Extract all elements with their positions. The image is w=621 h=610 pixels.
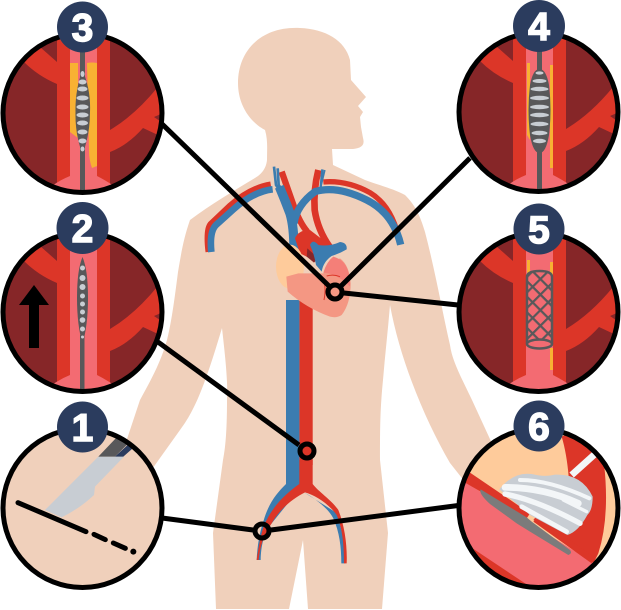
aorta	[299, 300, 313, 465]
connector lines	[158, 122, 470, 530]
panel: step 4 balloon inflated	[456, 0, 621, 199]
badge 2: 2	[72, 208, 93, 251]
badge 6: 6	[528, 406, 550, 449]
red tissue	[533, 430, 606, 563]
human body silhouette	[125, 28, 495, 609]
badge 5	[514, 204, 564, 254]
arrow: upward	[19, 285, 49, 348]
panel: step 2 catheter insertion	[0, 202, 170, 399]
heart	[276, 230, 351, 317]
badge 4	[513, 0, 565, 52]
circulatory system	[207, 167, 401, 563]
badge 6	[514, 400, 564, 452]
catheter and balloon	[528, 50, 550, 195]
pink vessel	[462, 483, 593, 585]
thin plaque	[527, 63, 553, 168]
badge 5: 5	[528, 209, 550, 252]
plaque	[70, 62, 97, 168]
catheter and balloon	[77, 257, 88, 390]
vena cava	[286, 300, 299, 465]
iliac vessels	[257, 460, 347, 563]
panel: step 5 stent placed	[456, 204, 621, 399]
applicator stick	[572, 454, 595, 475]
badge 1	[57, 402, 108, 452]
badge 3	[57, 2, 108, 52]
thin plaque	[527, 260, 553, 370]
badge 3: 3	[72, 7, 93, 50]
stent	[527, 271, 552, 348]
neck and arm arteries	[207, 167, 401, 252]
scalpel	[18, 437, 136, 555]
badge 1: 1	[72, 407, 93, 450]
gauze	[499, 474, 593, 535]
panel: step 3 balloon in plaque	[0, 2, 170, 200]
badge 2	[56, 202, 108, 254]
marker rings	[255, 285, 342, 538]
catheter and balloon	[75, 50, 90, 195]
neck and arm veins	[211, 189, 273, 252]
incision	[480, 489, 571, 555]
panel: step 1 incision	[0, 402, 165, 590]
panel: step 6 closure	[457, 400, 620, 600]
badge 4: 4	[528, 6, 550, 49]
